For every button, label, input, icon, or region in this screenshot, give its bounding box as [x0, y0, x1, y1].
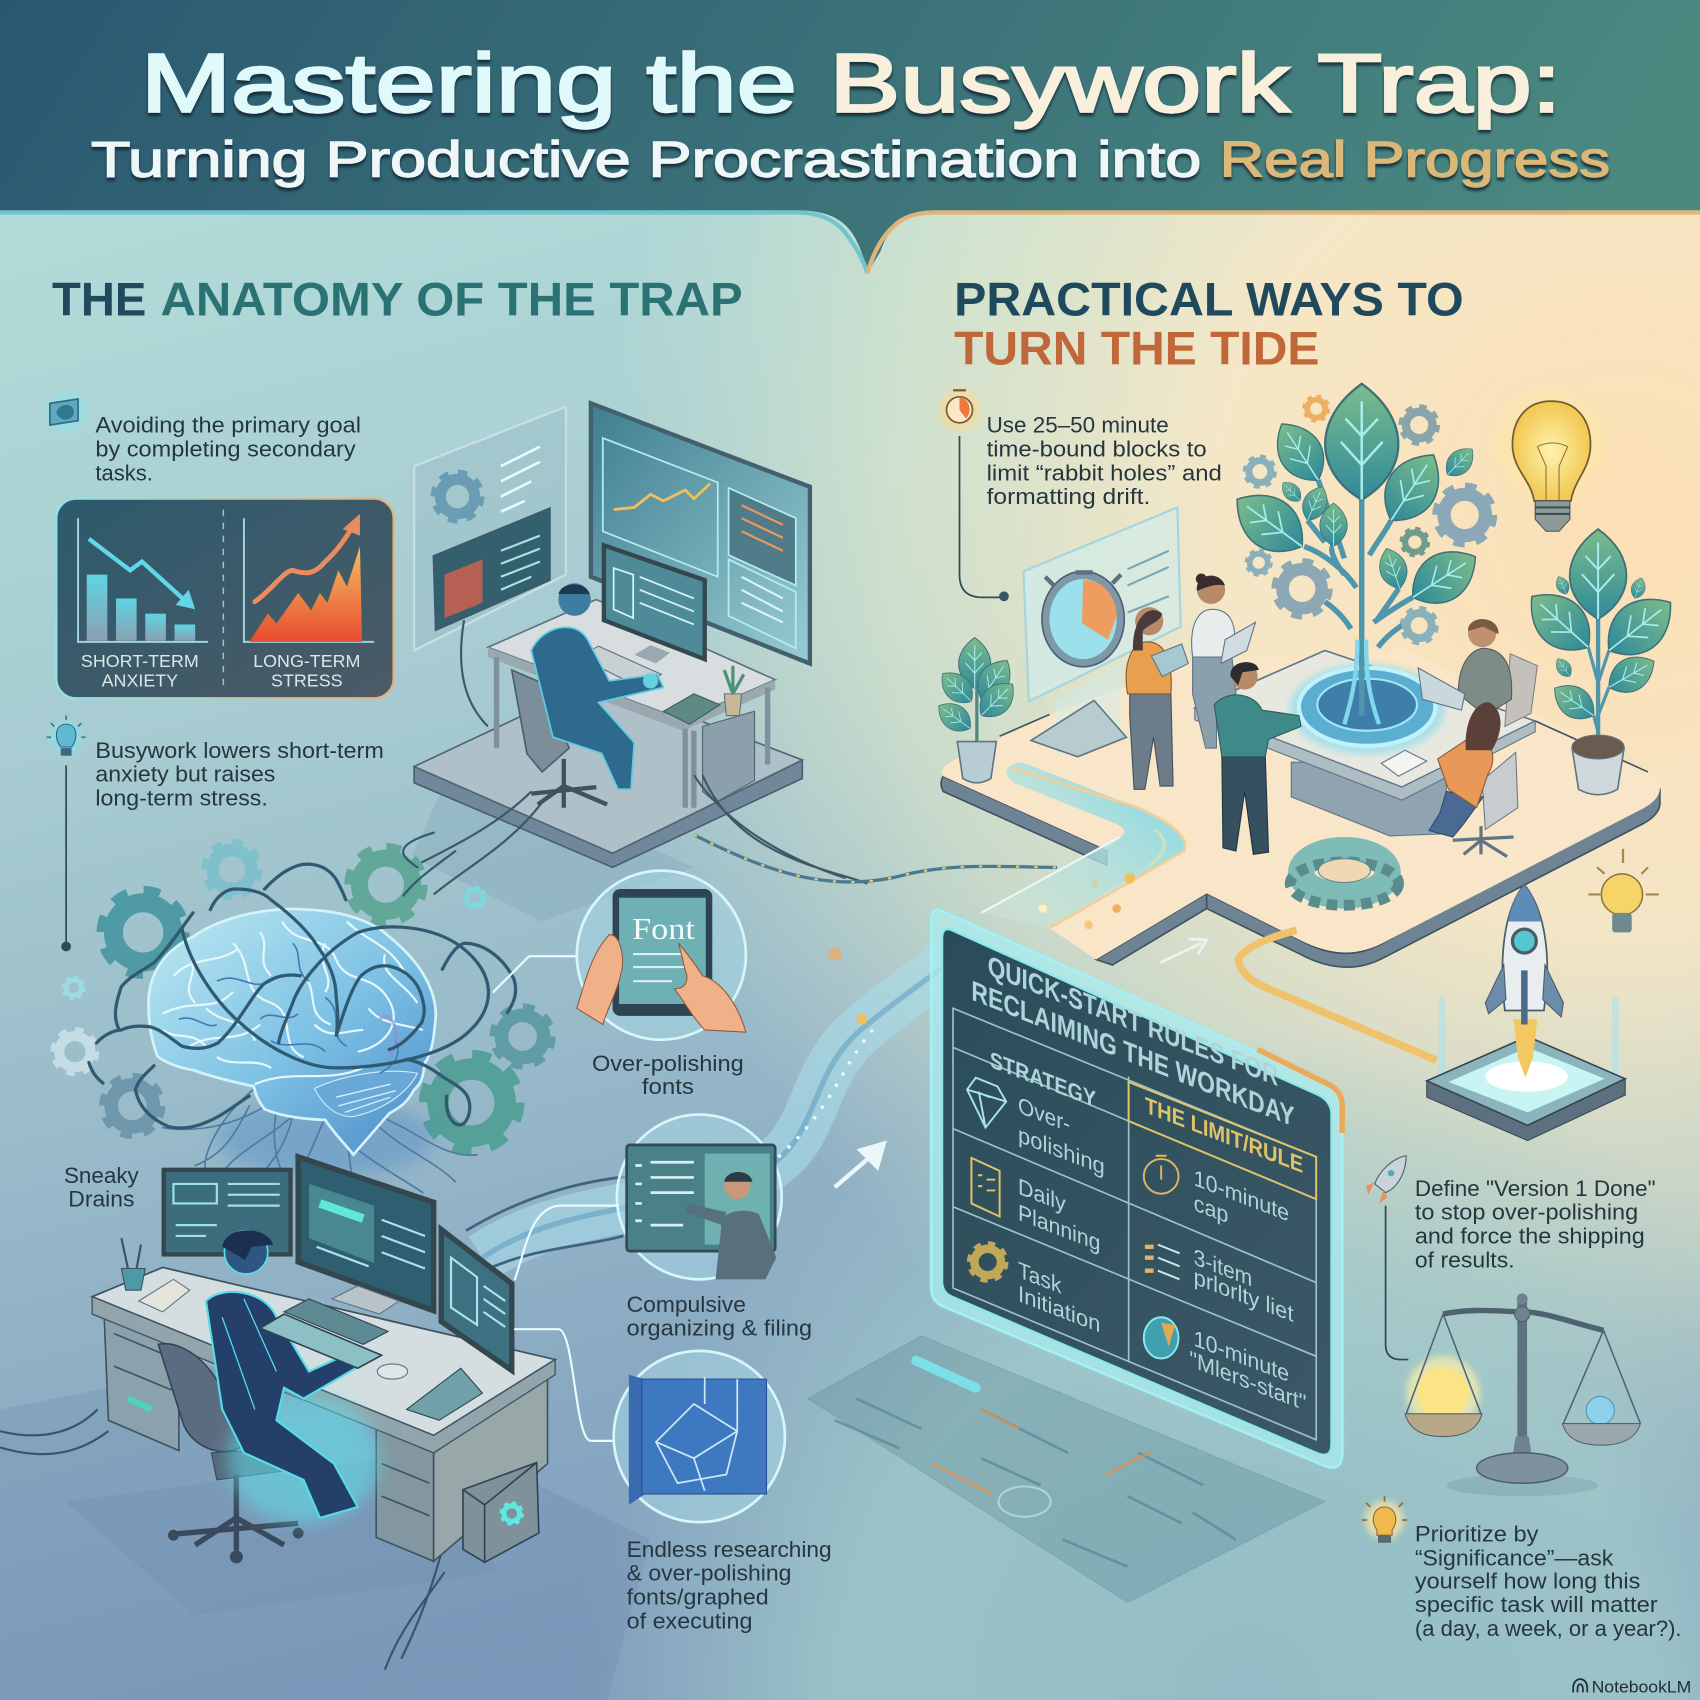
text: busywork: long-term stress.: [95, 786, 268, 811]
circle: blueprint: [614, 1351, 785, 1522]
keyboard: [260, 1314, 382, 1368]
right pan with ball: [1562, 1330, 1640, 1445]
plant: [664, 666, 744, 724]
strategy column: Daily: [1018, 1173, 1066, 1217]
limit column: 3-item: [1194, 1244, 1252, 1291]
monitor left: [164, 1170, 291, 1254]
monitor right: [441, 1229, 512, 1370]
panel: quick-start table: [931, 910, 1342, 1467]
label: endless researching: fonts/graphed: [627, 1585, 769, 1610]
connector: stopwatch line: [960, 436, 1003, 597]
road: [981, 763, 1185, 929]
left pan with glowing orb: [1405, 1314, 1482, 1437]
strategy column: Planning: [1018, 1199, 1100, 1256]
large plant: [1516, 529, 1686, 795]
table grid: [953, 1008, 1316, 1440]
broken gear: [1290, 850, 1399, 905]
icon: rocket small: [1366, 1156, 1406, 1203]
limit column: prlorlty liet: [1194, 1263, 1294, 1327]
text: busywork: Busywork lowers short-term: [95, 738, 384, 763]
left cabinet: [104, 1314, 179, 1451]
timer panel: [1023, 507, 1181, 757]
watermark: NotebookLM: NotebookLM: [1592, 1678, 1691, 1696]
heading: anatomy: THE: [52, 273, 146, 326]
right cabinet: [376, 1377, 548, 1561]
illustration: lower desk: [0, 1157, 555, 1670]
panel: anxiety vs stress chart: [56, 499, 394, 698]
label: over-polishing: [592, 1051, 744, 1099]
circle: organizing: [617, 1115, 782, 1279]
label: endless researching: & over-polishing: [627, 1561, 791, 1586]
gears around tree: [1245, 396, 1493, 643]
text: time blocks: [987, 413, 1222, 509]
limit column: cap: [1194, 1190, 1228, 1228]
limit column: THE LIMIT/RULE: [1145, 1092, 1303, 1178]
text: prioritize: yourself how long this: [1415, 1568, 1640, 1593]
text: prioritize: [1415, 1522, 1682, 1641]
connector: brain to font: [493, 956, 575, 992]
text: busywork: anxiety but raises: [95, 762, 275, 787]
title: Busywork Trap:: [829, 38, 1561, 130]
text: avoiding: [95, 413, 361, 485]
circle: font tablet: Font: [632, 912, 696, 946]
woman with tablet: [1126, 607, 1188, 789]
title: Real Progress: [1220, 132, 1610, 188]
gears: [53, 842, 552, 1149]
title: Mastering the: [141, 38, 797, 130]
label: over-polishing: fonts: [642, 1074, 694, 1099]
desk: [488, 600, 775, 808]
limit header frame: [1129, 1082, 1316, 1199]
clock: [1042, 571, 1124, 667]
long-term chart: LONG-TERM: [253, 651, 360, 671]
text: time blocks: Use 25–50 minute: [987, 413, 1169, 438]
chair: [512, 670, 607, 808]
strategy column: Initiation: [1018, 1281, 1100, 1337]
text: prioritize: (a day, a week, or a year?).: [1415, 1616, 1682, 1641]
title: Turning Productive Procrastination into: [91, 132, 1201, 188]
text: time blocks: time-bound blocks to: [987, 436, 1207, 461]
label: endless researching: Endless researching: [627, 1537, 832, 1562]
connector: desk to organizing: [515, 1206, 618, 1279]
short-term chart: SHORT-TERM: [81, 651, 199, 671]
text: prioritize: “Significance”—ask: [1415, 1546, 1614, 1571]
illustration: tangled brain: [53, 833, 552, 1193]
limit column: 10-minute: [1194, 1325, 1289, 1387]
illustration: rocket launch: [1427, 885, 1625, 1141]
heading: practical ways: TURN THE TIDE: [954, 322, 1319, 375]
text: version 1 done: Define "Version 1 Done": [1415, 1176, 1656, 1201]
monitor: [579, 545, 705, 687]
text: time blocks: limit “rabbit holes” and: [987, 460, 1222, 485]
screen: large chart: [591, 403, 810, 664]
ribbon: flowing path: [466, 835, 1099, 1274]
desk objects: [121, 1238, 482, 1420]
table base: [1195, 651, 1535, 836]
roots: [163, 1084, 477, 1193]
text: version 1 done: of results.: [1415, 1247, 1515, 1272]
icon: bulb small: [1362, 1496, 1407, 1543]
heading: practical ways: [954, 273, 1464, 375]
illustration: balance scale: [1405, 1293, 1640, 1496]
icon: small lightbulb: [1588, 849, 1659, 932]
strategy column: [990, 1047, 1105, 1337]
text: time blocks: formatting drift.: [987, 484, 1150, 509]
text: avoiding: tasks.: [95, 460, 153, 485]
icon: cube note: [47, 392, 86, 432]
pc tower: [463, 1463, 539, 1562]
label: compulsive: Compulsive: [627, 1292, 746, 1317]
text: version 1 done: [1415, 1176, 1656, 1272]
icon: stopwatch small: [939, 389, 980, 430]
label: endless researching: of executing: [627, 1608, 752, 1633]
label: over-polishing: Over-polishing: [592, 1051, 744, 1076]
text: prioritize: Prioritize by: [1415, 1522, 1539, 1547]
illustration: team platform: [932, 384, 1686, 967]
circle: font tablet: [577, 871, 746, 1040]
long-term chart: STRESS: [271, 670, 343, 690]
desk top: [92, 1267, 555, 1453]
strategy column: STRATEGY: [990, 1047, 1096, 1113]
table title: QUICK-START RULES FOR: [988, 951, 1278, 1093]
table icons: [967, 1078, 1180, 1358]
label: sneaky drains: [64, 1163, 140, 1212]
panel: keyboard shadow: [808, 1336, 1325, 1602]
text: busywork: [95, 738, 384, 811]
text: version 1 done: to stop over-polishing: [1415, 1200, 1638, 1225]
orange path: [1238, 930, 1437, 1060]
person: [206, 1230, 358, 1518]
cables: [0, 1399, 459, 1670]
brain body: [148, 909, 436, 1155]
heading: anatomy: ANATOMY OF THE TRAP: [160, 273, 743, 326]
glow below brain: [217, 1100, 434, 1176]
wires: [89, 833, 516, 1128]
text: prioritize: specific task will matter: [1415, 1592, 1658, 1617]
platform: [941, 651, 1660, 967]
limit column: 10-minute: [1194, 1165, 1289, 1226]
illustration: upper desk with screens: [412, 403, 867, 894]
seated man with laptop: [1418, 619, 1537, 726]
label: sneaky drains: Sneaky: [64, 1163, 140, 1188]
title: [91, 38, 1610, 188]
glow: [228, 1393, 379, 1523]
launch pad: [1427, 1036, 1625, 1141]
short-term chart: [78, 518, 208, 690]
connector line: [65, 765, 67, 946]
icon: large lightbulb: [1497, 390, 1606, 531]
connector: desk to blueprint: [515, 1329, 614, 1441]
seated woman: [1429, 702, 1518, 857]
tree: [1222, 384, 1488, 724]
label: sneaky drains: Drains: [68, 1187, 134, 1212]
limit column: "Mlers-start": [1189, 1346, 1306, 1416]
long-term chart: [244, 514, 374, 690]
strategy column: Task: [1018, 1257, 1062, 1299]
text: version 1 done: and force the shipping: [1415, 1224, 1645, 1249]
connector: rocket to scale: [1386, 1206, 1408, 1360]
connector dot: [61, 942, 71, 951]
screen: left hologram: [414, 407, 566, 651]
text: avoiding: by completing secondary: [95, 436, 357, 461]
tree glow base: [1289, 664, 1445, 755]
arrow on floor: [1160, 939, 1207, 963]
chair: [158, 1344, 304, 1563]
heading: practical ways: PRACTICAL WAYS TO: [954, 273, 1464, 326]
cables: [412, 620, 867, 894]
label: compulsive: [627, 1292, 812, 1341]
flame: [1514, 1019, 1537, 1078]
rocket: [1485, 885, 1563, 1025]
man in teal: [1214, 662, 1301, 854]
monitor center: [298, 1157, 434, 1314]
strategy column: polishing: [1018, 1121, 1105, 1180]
icon: lightbulb: [47, 716, 86, 756]
small plant: [932, 638, 1023, 783]
limit column: [1145, 1092, 1306, 1416]
person: [531, 583, 664, 789]
text: avoiding: Avoiding the primary goal: [95, 413, 361, 438]
short-term chart: ANXIETY: [102, 670, 178, 690]
label: endless researching: [627, 1537, 832, 1633]
woman with laptop: [1192, 574, 1255, 748]
header banner: [0, 0, 1700, 273]
strategy column: Over-: [1018, 1092, 1070, 1137]
connector dot: [999, 591, 1009, 601]
table title: RECLAIMING THE WORKDAY: [971, 976, 1295, 1134]
label: compulsive: organizing & filing: [627, 1316, 812, 1341]
